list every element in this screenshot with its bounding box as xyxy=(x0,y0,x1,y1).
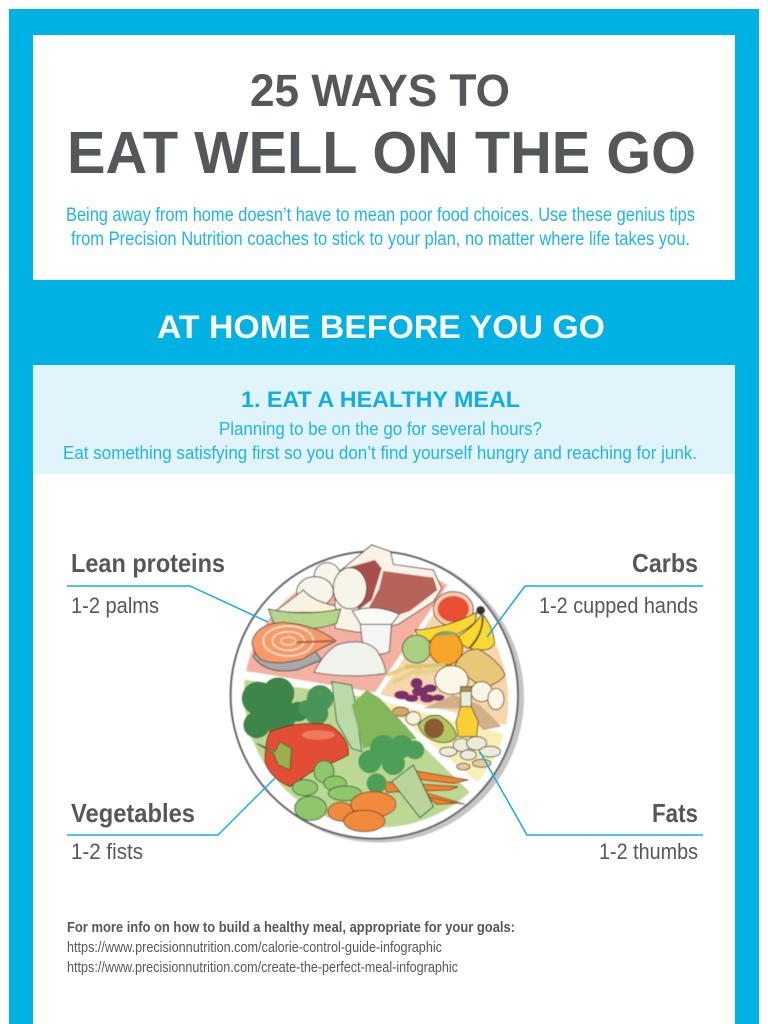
footer links: For more info on how to build a healthy meal, appropriate for your goals: xyxy=(67,920,515,936)
icon: basil leaves xyxy=(292,761,362,820)
heading: eat well on the go: EAT WELL ON THE GO xyxy=(67,120,696,186)
plate illustration xyxy=(231,545,524,843)
footer links xyxy=(67,920,515,976)
callout: fats: Fats xyxy=(652,798,698,828)
tip 1 heading: 1. EAT A HEALTHY MEAL xyxy=(241,387,520,412)
callout: carbs: 1-2 cupped hands xyxy=(539,593,698,618)
callout: vegetables xyxy=(67,778,275,864)
icon: kidney beans xyxy=(394,678,444,703)
icon: nuts xyxy=(393,707,421,725)
icon: potatoes xyxy=(435,649,505,710)
icon: rice xyxy=(314,642,386,676)
callout: lean proteins: 1-2 palms xyxy=(71,593,159,618)
icon: salmon steak xyxy=(252,622,336,671)
icon: leafy greens xyxy=(242,677,417,752)
callout: fats: 1-2 thumbs xyxy=(599,839,698,864)
icon: grains xyxy=(423,695,502,730)
tip 1 description: Planning to be on the go for several hours? xyxy=(219,418,542,439)
footer links: https://www.precisionnutrition.com/calorie-control-guide-infographic xyxy=(67,940,442,956)
section heading: at home before you go: AT HOME BEFORE YOU GO xyxy=(157,309,605,345)
callout: carbs xyxy=(487,548,703,637)
tip 1 description: Eat something satisfying first so you don’t find yourself hungry and reaching for junk. xyxy=(63,442,697,463)
callout: carbs: Carbs xyxy=(632,548,698,578)
icon: broccoli xyxy=(358,735,433,818)
icon: carrots xyxy=(383,770,468,804)
callout: lean proteins: Lean proteins xyxy=(71,548,225,578)
intro text: from Precision Nutrition coaches to stick to your plan, no matter where life takes you. xyxy=(71,229,690,250)
icon: steak xyxy=(335,545,442,632)
tip 1 description xyxy=(63,418,697,463)
plate rim xyxy=(231,551,524,843)
intro text xyxy=(66,205,695,250)
callout: vegetables: 1-2 fists xyxy=(71,839,143,864)
icon: bowl of cottage cheese xyxy=(268,590,341,629)
icon: bananas xyxy=(415,606,495,650)
callout: fats xyxy=(480,752,703,864)
icon: orange xyxy=(429,631,463,665)
icon: avocado xyxy=(418,715,457,743)
tip 1 header band xyxy=(33,365,735,474)
panel: title xyxy=(33,35,735,280)
heading: 25 ways to: 25 WAYS TO xyxy=(250,65,510,116)
callout: vegetables: Vegetables xyxy=(71,798,195,828)
icon: eggs xyxy=(297,563,367,609)
callout: lean proteins xyxy=(67,548,268,622)
icon: apple xyxy=(402,635,431,663)
panel: tip 1 content xyxy=(33,365,735,1024)
plate wedges xyxy=(244,565,508,828)
icon: carrot slices xyxy=(328,792,396,832)
icon: yogurt cup xyxy=(352,608,399,654)
icon: red bell pepper xyxy=(257,723,348,787)
icon: oil bottle xyxy=(456,687,478,737)
icon: seeds and walnuts xyxy=(440,737,501,770)
icon: grapefruit xyxy=(433,592,473,626)
footer links: https://www.precisionnutrition.com/create-the-perfect-meal-infographic xyxy=(67,960,458,976)
icon: pasta xyxy=(388,665,443,682)
